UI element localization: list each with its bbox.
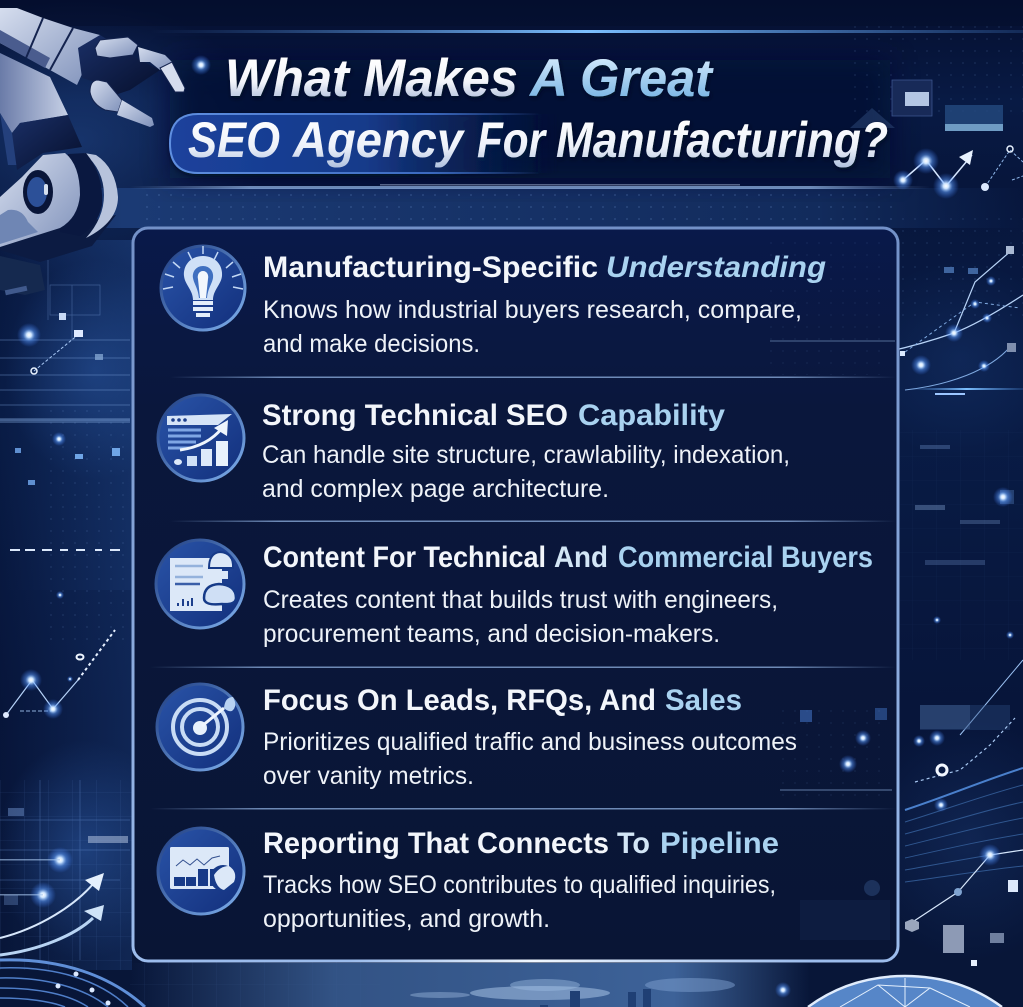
- left data field: [0, 260, 130, 960]
- title line 2: [188, 112, 888, 168]
- title line 2: Agency: [291, 112, 465, 168]
- title line 2: For: [477, 112, 547, 168]
- dividers: [150, 376, 896, 810]
- title pill: [170, 114, 560, 173]
- title line 1: What Makes: [225, 49, 518, 108]
- text: [263, 586, 778, 648]
- forearm: [0, 8, 100, 85]
- right top chart: [850, 80, 1023, 199]
- text: over vanity metrics.: [263, 762, 474, 790]
- text: [263, 728, 797, 790]
- title line 2: Manufacturing?: [556, 112, 888, 168]
- item 1: manufacturing-specific understanding: [161, 246, 826, 358]
- icon: browser with rising chart: [158, 395, 244, 481]
- upper arm: [0, 53, 68, 133]
- heading: Commercial Buyers: [618, 541, 873, 574]
- elbow: [0, 215, 116, 262]
- item 4: focus on leads, rfqs, and sales: [157, 684, 797, 790]
- heading: Manufacturing-Specific: [263, 251, 598, 284]
- heading: To: [617, 827, 650, 860]
- clouds and city skyline: [410, 978, 735, 1007]
- robot arm: [0, 8, 211, 295]
- title line 1: [225, 49, 714, 108]
- title: [170, 49, 888, 173]
- hand: [78, 35, 160, 95]
- text: opportunities, and growth.: [263, 905, 550, 933]
- text: [263, 871, 776, 933]
- text: [262, 441, 790, 503]
- heading: Capability: [578, 399, 725, 432]
- heading: [263, 827, 779, 860]
- globe: [775, 976, 1002, 1007]
- text: and complex page architecture.: [262, 475, 609, 503]
- title line 1: Great: [580, 49, 714, 108]
- panel bottom edge glow: [350, 960, 810, 962]
- icon: document and engineer: [156, 540, 244, 628]
- main panel: [133, 228, 898, 962]
- heading: Focus On Leads, RFQs, And: [263, 684, 656, 717]
- text: and make decisions.: [263, 330, 480, 358]
- text: procurement teams, and decision-makers.: [263, 620, 720, 648]
- wave arcs: bottom left: [0, 960, 145, 1007]
- heading: Pipeline: [660, 827, 779, 860]
- chart line: left: [3, 630, 115, 719]
- heading: Sales: [665, 684, 742, 717]
- panel texture: [760, 235, 895, 940]
- heading: Content For Technical: [263, 541, 546, 574]
- icon: light bulb: [161, 246, 245, 330]
- icon: dashboard report: [158, 828, 244, 914]
- heading: Strong Technical SEO: [262, 399, 568, 432]
- right network chart: [780, 246, 1023, 395]
- text: Knows how industrial buyers research, compare,: [263, 296, 802, 324]
- decorative light beams: [130, 30, 1023, 189]
- item 2: strong technical seo capability: [158, 395, 790, 503]
- item 5: reporting that connects to pipeline: [158, 827, 779, 933]
- right mid field: [915, 445, 1023, 735]
- text: Prioritizes qualified traffic and business outcomes: [263, 728, 797, 756]
- arrows: growth: [0, 873, 104, 955]
- text: [263, 296, 802, 358]
- title line 1: A: [528, 49, 568, 108]
- title line 2: SEO: [188, 112, 280, 168]
- star: [191, 55, 211, 75]
- icon: target with dart: [157, 684, 243, 770]
- heading: Reporting That Connects: [263, 827, 609, 860]
- heading: Understanding: [606, 251, 826, 284]
- wave mesh and chart: bottom right: [905, 705, 1023, 966]
- heading: [263, 251, 826, 284]
- heading: [262, 399, 725, 432]
- text: Tracks how SEO contributes to qualified inquiries,: [263, 871, 776, 899]
- heading: And: [554, 541, 608, 574]
- heading: [263, 541, 873, 574]
- text: Creates content that builds trust with engineers,: [263, 586, 778, 614]
- item 3: content for technical and commercial buyers: [156, 540, 873, 648]
- text: Can handle site structure, crawlability, indexation,: [262, 441, 790, 469]
